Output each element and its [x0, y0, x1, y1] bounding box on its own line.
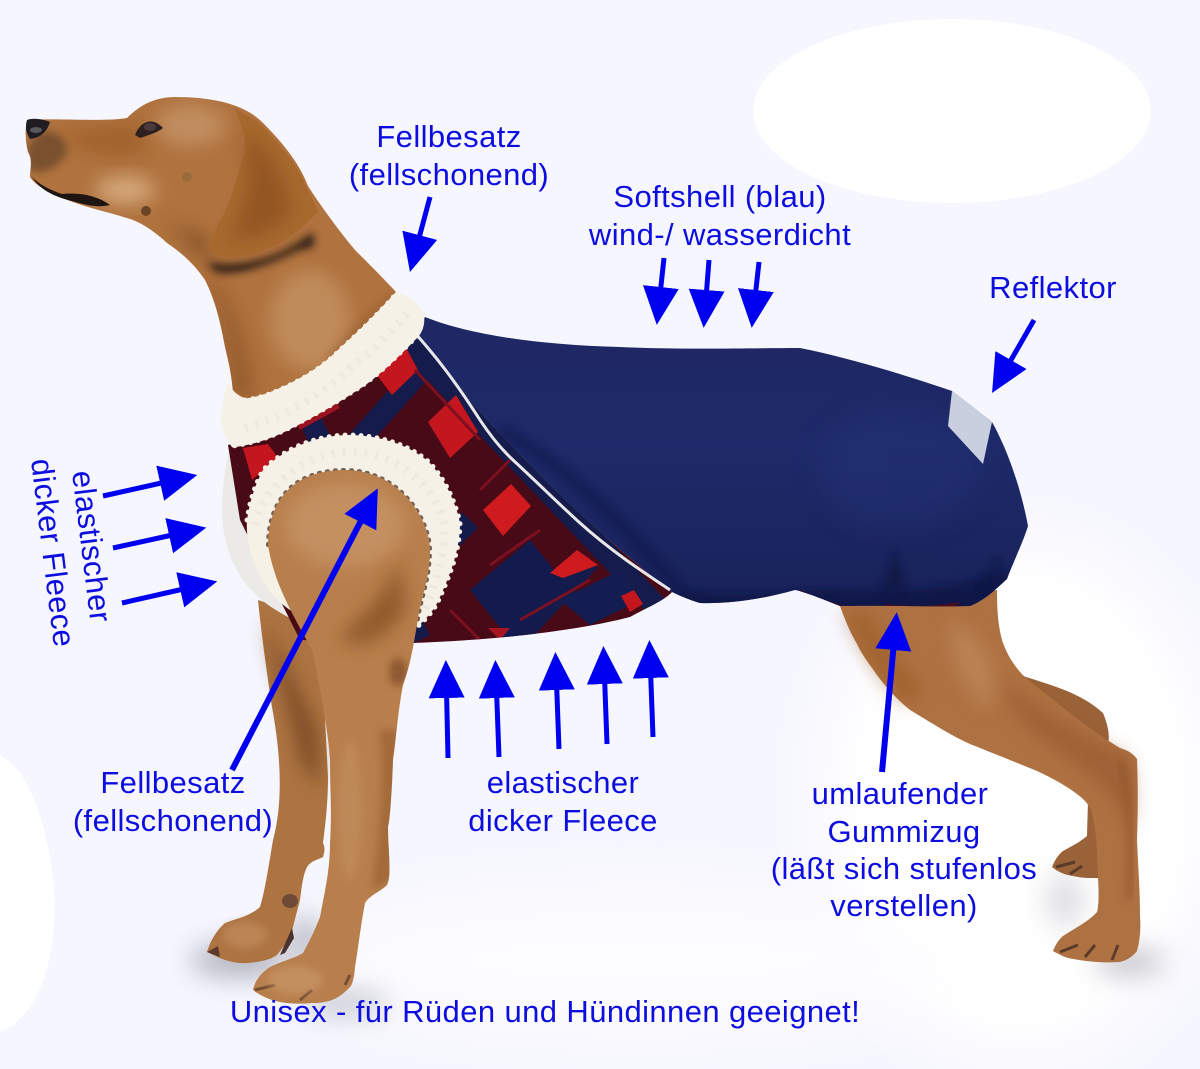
neck shadow under ear	[207, 232, 315, 273]
arrow: Fellbesatz top	[418, 197, 430, 243]
blue softshell coat	[415, 317, 1028, 606]
far front leg shade	[262, 620, 320, 790]
arrows: Softshell	[660, 258, 759, 298]
white piping	[415, 333, 670, 590]
near rear leg	[840, 590, 1140, 962]
ear shading	[230, 130, 290, 240]
reflector patch	[948, 391, 992, 464]
floor shadows	[190, 872, 1165, 1013]
label: rotated elastischer dicker Fleece: elastischer	[65, 469, 118, 624]
label: Fellbesatz top: (fellschonend)	[349, 157, 549, 192]
label: Softshell: wind-/ wasserdicht	[588, 217, 851, 252]
label: Fellbesatz armhole	[73, 765, 273, 838]
rear paw detail	[1056, 862, 1118, 960]
label: Softshell	[588, 179, 851, 252]
navy bands	[300, 330, 660, 645]
label: Gummizug: (läßt sich stufenlos	[771, 851, 1037, 886]
arrows: belly fleece	[446, 670, 653, 758]
ear	[208, 108, 318, 257]
label: Softshell: Softshell (blau)	[613, 179, 827, 214]
far front paw detail	[207, 894, 298, 957]
label: Fellbesatz top	[349, 119, 549, 192]
far rear leg	[1000, 675, 1110, 880]
eye	[135, 122, 163, 138]
label: belly fleece: elastischer	[487, 765, 639, 800]
label: Fellbesatz top: Fellbesatz	[376, 119, 522, 154]
arm hole fleece	[247, 435, 460, 627]
head and neck	[26, 97, 397, 420]
label: Fellbesatz armhole: Fellbesatz	[100, 765, 246, 800]
near front leg	[253, 470, 430, 1004]
dog illustration	[26, 97, 1140, 1004]
whisker bumps	[141, 172, 192, 216]
plaid fleece lining	[228, 338, 672, 643]
label: belly fleece: dicker Fleece	[468, 803, 658, 838]
neck collar fleece	[222, 293, 423, 446]
label: Reflektor: Reflektor	[989, 270, 1117, 305]
label: Gummizug: Gummizug	[827, 814, 981, 849]
label: Fellbesatz armhole: (fellschonend)	[73, 803, 273, 838]
white patch lower left	[0, 755, 55, 1032]
arrow: Gummizug	[882, 642, 894, 772]
far front leg	[207, 600, 328, 963]
head shading	[27, 105, 395, 400]
red squares	[378, 349, 418, 395]
label: rotated elastischer dicker Fleece	[24, 457, 118, 649]
label: rotated elastischer dicker Fleece: dicker Fleece	[24, 457, 82, 649]
footer note: Unisex - für Rüden und Hündinnen geeignet!	[230, 994, 860, 1029]
label: belly fleece	[468, 765, 658, 838]
label: Gummizug: umlaufender	[812, 776, 988, 811]
muzzle and nose	[26, 119, 110, 206]
chest fleece at left	[222, 445, 310, 618]
arrow: Reflektor	[1007, 320, 1034, 367]
white oval patch top right	[753, 19, 1151, 203]
thin red lines	[415, 370, 590, 640]
arrow: Fellbesatz armhole	[232, 515, 364, 770]
coat folds and elastic hem	[498, 426, 1010, 606]
label: Gummizug: verstellen)	[830, 888, 978, 923]
rear leg shading	[1000, 680, 1133, 830]
label: Gummizug	[771, 776, 1037, 923]
near leg shading	[255, 483, 407, 1000]
arrows: chest fleece	[103, 482, 188, 603]
